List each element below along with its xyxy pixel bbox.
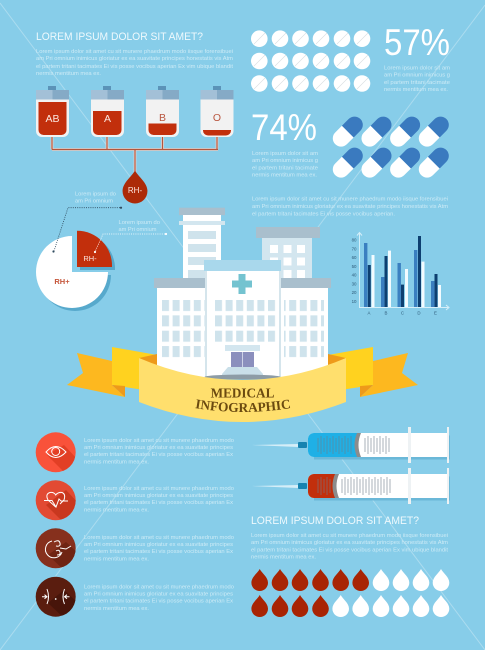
- blood drop: RH-: [123, 170, 147, 204]
- bar chart: 70: [352, 246, 357, 251]
- callout: white pointer label: Lorem ipsum do: [118, 220, 161, 226]
- text block: eye: Lorem ipsum dolor sit amet cu sit munere phaedrum modo: [84, 438, 235, 444]
- text block: 74% note: el partem tritani tacimate: [252, 166, 319, 172]
- text block: top left paragraph: am Pri omnium inimicus gloriatur ex ea suavitate principes honestatis vis Atm: [36, 56, 233, 62]
- bar chart: 50: [352, 264, 357, 269]
- callout: dark pointer label: am Pri omnium: [75, 198, 113, 204]
- text block: eye: el partem tritani tacimates Ei vis posse vocibus aperian Ex: [84, 452, 233, 458]
- text block: muscle: am Pri omnium inimicus gloriatur ex ea suavitate principes: [84, 592, 233, 598]
- pie chart: RH share: RH+: [54, 277, 70, 286]
- text block: 74% note: [252, 151, 319, 178]
- text block: lower right paragraph: el partem tritani tacimates Ei vis posse vocibus aperian Ex vim ubique blandit: [251, 548, 448, 554]
- text block: 57% note: am Pri omnium inimicus g: [384, 72, 450, 78]
- text block: cell: am Pri omnium inimicus gloriatur ex ea suavitate principes: [84, 542, 233, 548]
- bar chart: 20: [352, 290, 357, 295]
- icon: cell virus: [36, 528, 76, 568]
- blood bag: O: [200, 86, 234, 137]
- hospital illustration: [154, 208, 331, 378]
- text block: muscle: Lorem ipsum dolor sit amet cu sit munere phaedrum modo: [84, 584, 235, 590]
- ribbon right tail: [360, 353, 418, 397]
- bar chart: B: [385, 310, 388, 316]
- icon: medical cross: [232, 274, 252, 294]
- text block: heart: [84, 486, 235, 514]
- bar chart: E: [434, 310, 437, 316]
- back left tower: [179, 208, 225, 280]
- callout: dark pointer label: Lorem ipsum do: [75, 192, 117, 198]
- text block: chart intro: am Pri omnium inimicus gloriatur ex ea suavitate principes honestatis vis Atm: [252, 204, 448, 210]
- text block: heart: Lorem ipsum dolor sit amet cu sit munere phaedrum modo: [84, 486, 235, 492]
- text block: cell: Lorem ipsum dolor sit amet cu sit munere phaedrum modo: [84, 535, 235, 541]
- text block: heart: nermis mentitum mea ex.: [84, 508, 149, 514]
- entrance door: [222, 345, 263, 376]
- syringe: blue: [252, 427, 450, 463]
- heading: lower right: LOREM IPSUM DOLOR SIT AMET?: [251, 515, 419, 527]
- text block: 57% note: nermis mentitum mea ex.: [384, 87, 448, 93]
- text block: 57% note: Lorem ipsum dolor sit am: [384, 66, 450, 72]
- stat: 57%: 57%: [384, 22, 450, 63]
- bar chart: 80: [352, 238, 357, 242]
- blood bag connector pipes: [52, 137, 218, 172]
- ribbon hospital shadow: [204, 374, 280, 380]
- text block: 57% note: [384, 66, 451, 93]
- banner title: INFOGRAPHIC: [195, 399, 290, 412]
- bar chart: A: [368, 310, 371, 316]
- banner title: MEDICAL: [211, 386, 275, 400]
- callout: white pointer label: am Pri omnium: [118, 227, 157, 233]
- blood drop: RH-: RH-: [128, 186, 142, 195]
- text block: cell: el partem tritani tacimates Ei vis posse vocibus aperian Ex: [84, 549, 233, 555]
- text block: eye: [84, 438, 235, 466]
- text block: heart: el partem tritani tacimates Ei vis posse vocibus aperian Ex: [84, 500, 233, 506]
- ribbon left tail: [67, 353, 125, 397]
- text block: eye: am Pri omnium inimicus gloriatur ex ea suavitate principes: [84, 445, 233, 451]
- text block: 57% note: el partem tritani tacimate: [384, 80, 451, 86]
- text block: 74% note: Lorem ipsum dolor sit am: [252, 151, 318, 157]
- text block: top left paragraph: Lorem ipsum dolor sit amet cu sit munere phaedrum modo iisque forensibuei: [36, 49, 233, 55]
- main wings: [154, 278, 331, 378]
- pie chart: RH share: [36, 230, 116, 311]
- bar chart: C: [401, 310, 404, 316]
- central block: [204, 260, 281, 378]
- text block: eye: nermis mentitum mea ex.: [84, 460, 149, 466]
- text block: muscle: [84, 584, 235, 612]
- text block: top left paragraph: nermis mentitum mea ex.: [36, 71, 101, 77]
- text block: top left paragraph: el partem tritani tacimates Ei vis posse vocibus aperian Ex vim ubique blandit: [36, 64, 233, 70]
- text block: chart intro: el partem tritani tacimates Ei vis posse vocibus aperian.: [252, 212, 395, 218]
- text block: lower right paragraph: [251, 533, 448, 560]
- ribbon main band: [139, 358, 346, 422]
- bar chart: 40: [352, 272, 357, 278]
- text block: cell: [84, 535, 235, 562]
- blood bag: B: B: [159, 112, 166, 124]
- text block: 74% note: am Pri omnium inimicus g: [252, 158, 318, 164]
- text block: lower right paragraph: nermis mentitum mea ex.: [251, 554, 316, 560]
- callout: white pointer label: [94, 220, 167, 253]
- icon: eye: [36, 432, 76, 472]
- callout: dark pointer label: [52, 192, 122, 253]
- heading: top left: LOREM IPSUM DOLOR SIT AMET?: [36, 31, 203, 43]
- bar chart: [352, 232, 449, 316]
- text block: cell: nermis mentitum mea ex.: [84, 556, 149, 562]
- text block: lower right paragraph: Lorem ipsum dolor sit amet cu sit munere phaedrum modo iisque forensibuei: [251, 533, 448, 539]
- banner title: [195, 386, 290, 412]
- drops pictogram: row two: [251, 595, 449, 617]
- blood bag: AB: [36, 86, 69, 137]
- bar chart: 60: [352, 255, 357, 260]
- text block: 74% note: nermis mentitum mea ex.: [252, 172, 317, 178]
- bar chart: 30: [352, 281, 357, 286]
- text block: chart intro: [252, 196, 448, 218]
- blood bag: AB: AB: [45, 113, 60, 125]
- text block: heart: am Pri omnium inimicus gloriatur ex ea suavitate principes: [84, 493, 233, 499]
- bar chart: D: [417, 310, 421, 316]
- bar chart: 10: [352, 299, 357, 304]
- text block: muscle: el partem tritani tacimates Ei vis posse vocibus aperian Ex: [84, 598, 233, 604]
- blood bag: A: A: [104, 113, 111, 125]
- drops pictogram: row one: [251, 569, 449, 591]
- text block: chart intro: Lorem ipsum dolor sit amet cu sit munere phaedrum modo iisque forensibuei: [252, 196, 448, 202]
- icon: muscle compression: [36, 577, 78, 618]
- syringe: red: [252, 468, 450, 504]
- tablets grid: [251, 30, 370, 92]
- stat: 74%: 74%: [251, 107, 317, 148]
- back right building: [256, 227, 320, 280]
- text block: lower right paragraph: am Pri omnium inimicus gloriatur ex ea suavitate principes honestatis vis Atm: [251, 540, 448, 546]
- text block: muscle: nermis mentitum mea ex.: [84, 606, 149, 612]
- blood bag: B: [146, 86, 179, 137]
- ribbon banner: [67, 347, 418, 422]
- capsules grid: [329, 113, 452, 181]
- icon: heart pulse: [36, 480, 76, 520]
- blood bag: O: O: [213, 112, 221, 124]
- ribbon folds: [112, 347, 373, 397]
- blood bag: A: [91, 86, 124, 137]
- text block: top left paragraph: [36, 49, 233, 77]
- pie chart: RH share: RH-: [83, 254, 97, 263]
